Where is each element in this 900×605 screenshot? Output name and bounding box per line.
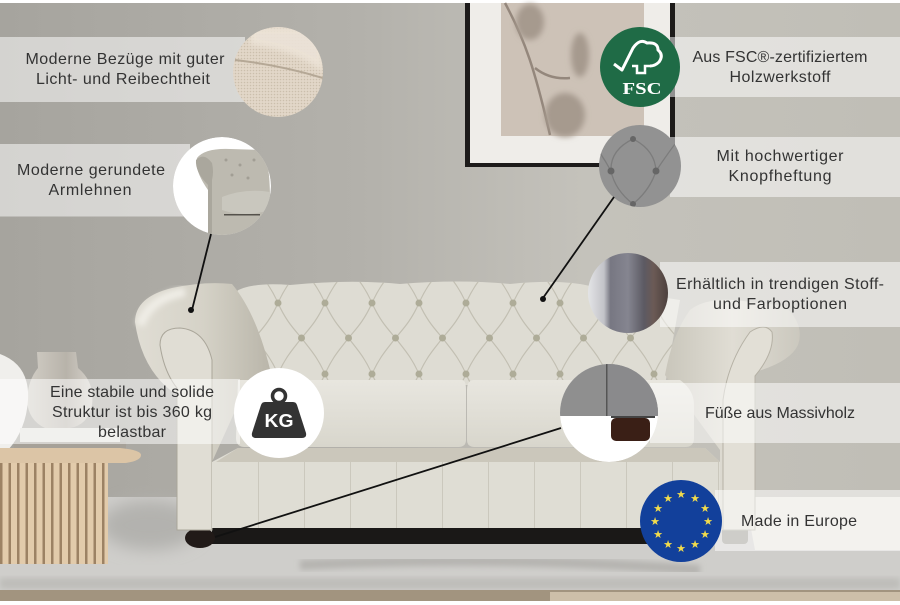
table top: [0, 448, 141, 463]
text: tufting: Mit hochwertiger: [716, 148, 844, 165]
text: FSC: [692, 49, 868, 86]
icon: wooden foot circle: [558, 362, 660, 462]
left seat cushion: [236, 380, 466, 447]
icon: EU flag: ★: [700, 529, 710, 541]
icon: colour swatches circle: [588, 253, 668, 333]
leader line: feet: [215, 428, 561, 537]
icon: EU flag: ★: [650, 516, 660, 528]
icon: EU flag: ★: [653, 503, 663, 515]
callout band: weight: [0, 379, 240, 444]
vases: [0, 352, 92, 450]
callout band: made in Europe: [715, 490, 900, 551]
text: fabric: [26, 51, 225, 88]
callout band: FSC: [670, 37, 900, 97]
books: [14, 428, 126, 453]
sofa: [135, 275, 800, 548]
icon: EU flag: ★: [676, 543, 686, 555]
text: FSC: Aus FSC®-zertifiziertem: [692, 49, 868, 66]
icon: KG weight: [234, 368, 324, 458]
text: armrests: Moderne gerundete: [17, 162, 165, 179]
callout band: armrests: [0, 144, 190, 216]
leader line: tufting: [540, 197, 614, 302]
icon: FSC logo: [600, 27, 680, 107]
icon: armchair circle: [173, 137, 271, 235]
text: armrests: Armlehnen: [48, 182, 132, 199]
icon: EU flag: ★: [700, 503, 710, 515]
callout band: tufting: [670, 137, 900, 197]
text: made in Europe: Made in Europe: [741, 513, 857, 530]
text: fabric: Moderne Bezüge mit guter: [26, 51, 225, 68]
text: colour options: und Farboptionen: [713, 296, 847, 313]
icon: tufting circle: [598, 124, 682, 208]
leader line: armrest: [188, 234, 211, 313]
side table with vases and books: [0, 352, 141, 564]
text: tufting: [716, 148, 844, 185]
sofa shadow and feet: [185, 525, 748, 548]
icon: KG weight: KG: [264, 411, 294, 431]
callout band: fabric: [0, 37, 245, 102]
text: weight: Struktur ist bis 360 kg: [52, 404, 212, 421]
icon: FSC logo: FSC: [622, 79, 662, 98]
tufted backrest: [230, 275, 680, 385]
icon: EU flag: ★: [690, 539, 700, 551]
icon: EU flag: ★: [653, 529, 663, 541]
text: tufting: Knopfheftung: [728, 168, 832, 185]
icon: EU flag: ★: [676, 489, 686, 501]
right arm: [665, 300, 800, 530]
text: weight: [50, 384, 214, 441]
text: weight: belastbar: [98, 424, 167, 441]
icon: EU flag: ★: [690, 493, 700, 505]
text: FSC: Holzwerkstoff: [730, 69, 831, 86]
framed botanical wall art: [465, 3, 675, 167]
icon: EU flag: ★: [663, 539, 673, 551]
fluted table base: [0, 462, 108, 564]
text: colour options: [676, 276, 884, 313]
icon: EU flag: ★: [703, 516, 713, 528]
text: feet: Füße aus Massivholz: [705, 405, 855, 422]
text: colour options: Erhältlich in trendigen Stoff-: [676, 276, 884, 293]
right seat cushion: [467, 380, 694, 447]
text: armrests: [17, 162, 165, 199]
callout band: feet: [650, 383, 900, 443]
text: fabric: Licht- und Reibechtheit: [36, 71, 211, 88]
icon: fabric swatch circle: [233, 27, 323, 117]
left arm: [135, 283, 272, 530]
callout band: colour options: [660, 262, 900, 327]
icon: EU flag: ★: [663, 493, 673, 505]
seat rail and base: [212, 448, 720, 528]
text: weight: Eine stabile und solide: [50, 384, 214, 401]
icon: EU flag: [640, 480, 722, 562]
